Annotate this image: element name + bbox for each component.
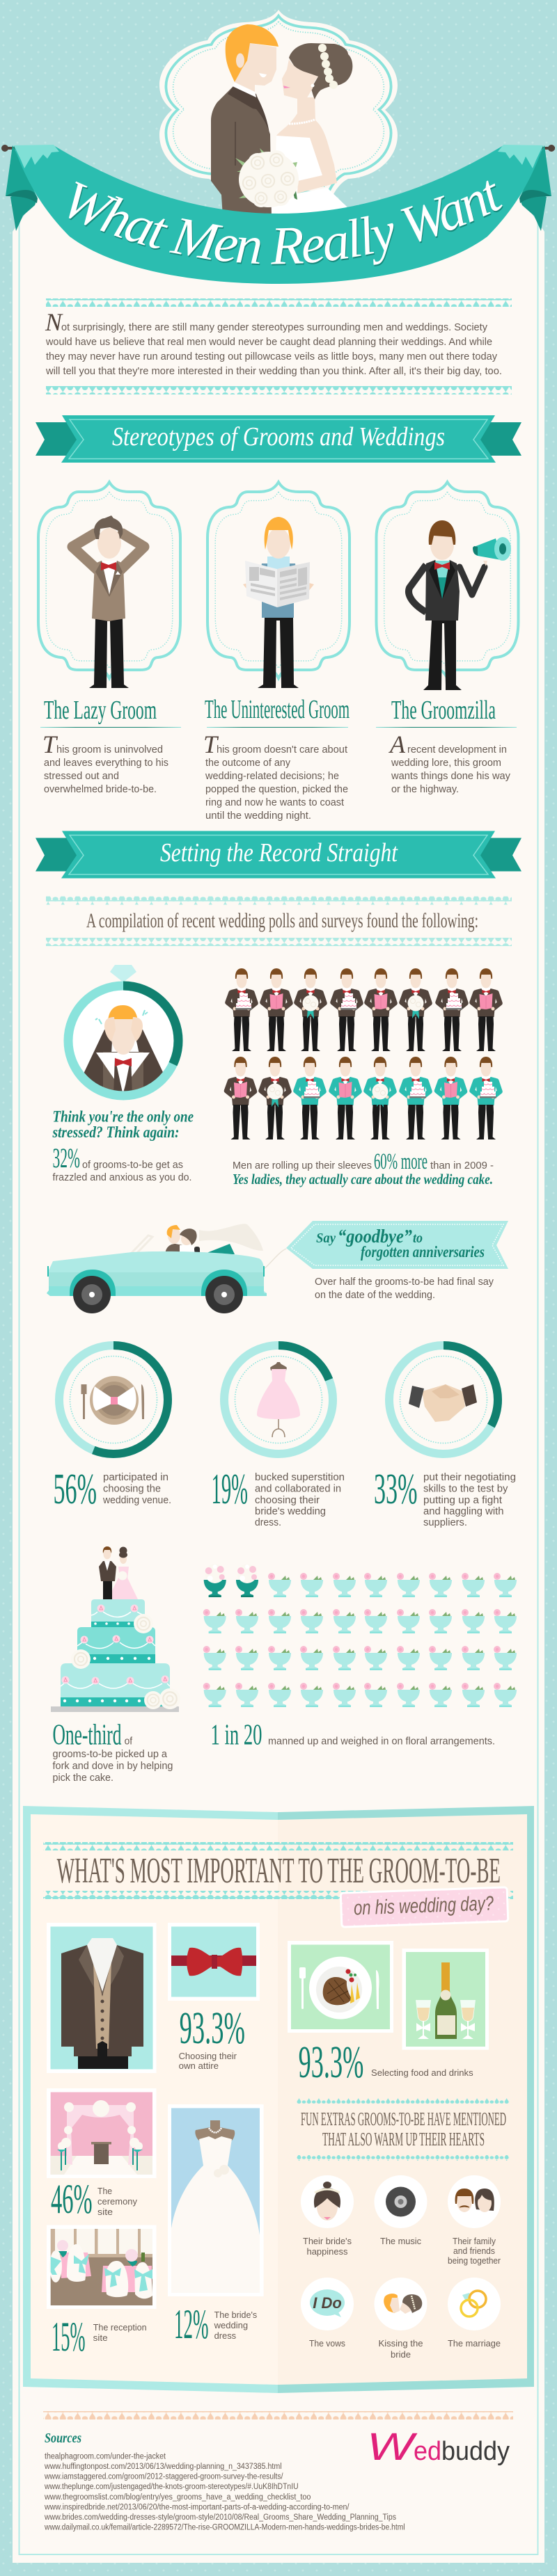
ring stat text: frazzled and anxious as you do. bbox=[53, 1172, 192, 1183]
icon: handshake bbox=[409, 1384, 477, 1422]
stat: 56 percent: 56% bbox=[53, 1466, 97, 1513]
stat: 33 percent: suppliers. bbox=[423, 1517, 467, 1528]
ring stat graphic bbox=[68, 965, 178, 1101]
left ribbon tail bbox=[1, 145, 38, 231]
logo: Wedbuddy: buddy bbox=[441, 2437, 510, 2466]
car illustration bbox=[47, 1224, 286, 1313]
sources: www.iamstaggered.com/groom/2012-staggered-groom-survey-the-results/ bbox=[44, 2472, 283, 2481]
stat: 56 percent: participated in bbox=[103, 1472, 168, 1483]
stat: 56 percent: choosing the bbox=[103, 1483, 161, 1494]
anniversary text bbox=[315, 1277, 494, 1301]
stat: 15 percent reception: site bbox=[93, 2333, 108, 2343]
pictogram: forty floral vases bbox=[203, 1564, 517, 1707]
pink tag bbox=[340, 1887, 508, 1927]
sleeves stat text: 60% more bbox=[374, 1149, 427, 1174]
column: lazy groom: The Lazy Groom bbox=[44, 696, 157, 725]
floral stat text bbox=[210, 1720, 495, 1752]
sources: Sources bbox=[45, 2431, 81, 2446]
stat: 33 percent: skills to the test by bbox=[423, 1483, 508, 1494]
stat: 19 percent: choosing their bbox=[255, 1495, 320, 1506]
sleeves stat text bbox=[233, 1149, 494, 1187]
sources: www.huffingtonpost.com/2013/06/13/wedding-planning_n_3437385.html bbox=[44, 2463, 282, 2471]
intro paragraph bbox=[45, 308, 502, 377]
column: groomzilla: The Groomzilla bbox=[391, 696, 496, 725]
icon: plate and napkin bbox=[81, 1376, 144, 1425]
icon: diamond bbox=[110, 965, 136, 982]
flag callout: “goodbye” bbox=[338, 1226, 412, 1247]
divider bbox=[46, 896, 512, 904]
title ribbon bbox=[1, 145, 555, 284]
intro paragraph: ot surprisingly, there are still many gender stereotypes surrounding men and weddings. Society bbox=[61, 322, 488, 333]
stat: 19 percent: bride's wedding bbox=[255, 1506, 326, 1517]
illustration: groom bbox=[211, 24, 278, 217]
ring stat text: stressed? Think again: bbox=[52, 1123, 180, 1141]
stat: 12 percent gown: The bride's bbox=[214, 2310, 258, 2320]
divider bbox=[46, 386, 512, 394]
column: groomzilla: wants things done his way bbox=[391, 771, 511, 782]
divider bbox=[43, 1842, 513, 1850]
stat: food and drinks bbox=[299, 2037, 473, 2088]
stat: attire: own attire bbox=[179, 2061, 219, 2071]
stat: 12 percent gown: wedding bbox=[214, 2320, 248, 2330]
hero plaque bbox=[159, 10, 398, 198]
divider bbox=[297, 2155, 510, 2161]
intro paragraph: will tell you that they're more interested in their wedding than you think. After all, it's their big day, too. bbox=[45, 366, 502, 377]
column: lazy groom: T bbox=[42, 730, 58, 758]
column: lazy groom: overwhelmed bride-to-be. bbox=[44, 784, 157, 795]
ring stat text: of grooms-to-be get as bbox=[82, 1160, 183, 1171]
flag callout: to bbox=[413, 1231, 423, 1246]
column: uninterested groom: the outcome of any bbox=[205, 758, 291, 769]
stat: 33 percent: 33% bbox=[374, 1466, 418, 1513]
sleeves stat text: Men are rolling up their sleeves bbox=[233, 1160, 372, 1171]
ribbon arc bbox=[14, 145, 543, 284]
sources: www.thegroomslist.com/blog/entry/yes_grooms_have_a_wedding_checklist_too bbox=[44, 2493, 311, 2502]
cake stat text: of bbox=[125, 1736, 133, 1747]
column: groomzilla: recent development in bbox=[407, 744, 507, 755]
stat: food and drinks: 93.3% bbox=[299, 2037, 363, 2088]
illustration: bride bbox=[240, 43, 352, 217]
extra: bride's happiness: happiness bbox=[306, 2246, 348, 2257]
cake stat text bbox=[53, 1720, 173, 1784]
cake stat text: fork and dove in by helping bbox=[53, 1761, 173, 1772]
cake stat text: One-third bbox=[53, 1720, 121, 1752]
column: uninterested groom: popped the question, picked the bbox=[205, 784, 348, 795]
photo: steak dinner bbox=[288, 1941, 393, 2033]
figure: groomzilla bbox=[409, 520, 511, 690]
column: uninterested groom: wedding-related decisions; he bbox=[205, 771, 339, 782]
column: uninterested groom bbox=[203, 695, 350, 822]
section banner: record straight bbox=[36, 831, 521, 878]
donut: 56 percent venue bbox=[59, 1345, 168, 1454]
stat: 15 percent reception: 15% bbox=[52, 2314, 85, 2360]
divider bbox=[43, 1891, 513, 1899]
extra: the marriage bbox=[448, 2278, 501, 2349]
column: groomzilla: A bbox=[389, 730, 406, 758]
column: lazy groom: stressed out and bbox=[44, 771, 119, 782]
extra: kissing the bride: bride bbox=[391, 2349, 411, 2360]
sources: www.brides.com/wedding-dresses-style/groom-style/2010/08/Real_Grooms_Share_Wedding_Planning_Tips bbox=[44, 2513, 396, 2522]
extra: the music: The music bbox=[380, 2236, 421, 2246]
wedding cake illustration bbox=[51, 1546, 180, 1712]
flag callout: forgotten anniversaries bbox=[361, 1243, 485, 1261]
donut: 19 percent dress bbox=[224, 1345, 333, 1454]
photo: ceremony site bbox=[47, 2088, 156, 2178]
extra: the vows: The vows bbox=[309, 2338, 345, 2349]
column: uninterested groom: until the wedding night. bbox=[205, 810, 311, 822]
section banner: stereotypes bbox=[36, 415, 521, 463]
stat: 46 percent ceremony: 46% bbox=[51, 2176, 93, 2222]
sources: www.inspiredbride.net/2013/06/20/the-most-important-parts-of-a-wedding-according-to-men/ bbox=[44, 2503, 350, 2511]
stat: 15 percent reception: The reception bbox=[93, 2322, 147, 2333]
bouquet bbox=[235, 148, 299, 207]
extra: bride's happiness bbox=[301, 2175, 354, 2257]
ring stat text: Think you're the only one bbox=[53, 1107, 194, 1126]
floral stat text: 1 in 20 bbox=[210, 1720, 262, 1752]
extra: family and friends: Their family bbox=[453, 2236, 496, 2246]
extra: the marriage: The marriage bbox=[448, 2338, 501, 2349]
extra: the vows: I Do bbox=[313, 2294, 342, 2312]
anniversary text: on the date of the wedding. bbox=[315, 1290, 435, 1301]
column: uninterested groom: his groom doesn't care about bbox=[217, 744, 347, 755]
photo: bridal gown bbox=[168, 2104, 264, 2296]
photo: champagne bbox=[402, 1949, 489, 2050]
anniversary text: Over half the grooms-to-be had final say bbox=[315, 1277, 494, 1288]
stat: 19 percent: bucked superstition bbox=[255, 1472, 345, 1483]
ribbon fold highlights bbox=[14, 145, 543, 168]
stat: 46 percent ceremony: ceremony bbox=[97, 2196, 137, 2207]
intro paragraph: would have us believe that real men would never be caught dead planning their weddings. And while bbox=[45, 337, 492, 348]
cake stat text: grooms-to-be picked up a bbox=[53, 1749, 168, 1760]
stat: 46 percent ceremony: site bbox=[97, 2207, 113, 2217]
extra: kissing the bride: Kissing the bbox=[379, 2338, 423, 2349]
logo: Wedbuddy: ed bbox=[414, 2437, 441, 2466]
cake stat text: pick the cake. bbox=[53, 1773, 113, 1784]
stat: attire: Choosing their bbox=[179, 2051, 237, 2061]
photo: reception site bbox=[47, 2225, 156, 2309]
title: What Men Really Want bbox=[68, 181, 503, 266]
fun extras heading bbox=[301, 2109, 506, 2150]
divider bbox=[297, 2098, 510, 2104]
intro paragraph: N bbox=[45, 308, 63, 336]
flag callout: Say bbox=[316, 1231, 336, 1246]
extra: family and friends bbox=[448, 2175, 501, 2266]
stat: attire bbox=[179, 2003, 245, 2071]
stat: 12 percent gown: dress bbox=[214, 2330, 237, 2341]
divider bbox=[46, 938, 512, 946]
frame: lazy groom bbox=[38, 482, 180, 678]
donut: 33 percent negotiation bbox=[389, 1345, 498, 1454]
column: uninterested groom: ring and now he wants to coast bbox=[205, 797, 344, 808]
sources: www.dailymail.co.uk/femail/article-2289572/The-rise-GROOMZILLA-Modern-men-hands-weddings-brides-be.html bbox=[44, 2524, 405, 2532]
stat: 33 percent: put their negotiating bbox=[423, 1472, 516, 1483]
stat: 46 percent ceremony: The bbox=[97, 2186, 112, 2196]
stat: 56 percent bbox=[53, 1466, 171, 1513]
column: groomzilla bbox=[376, 696, 517, 795]
photo: suit bbox=[47, 1923, 156, 2073]
stat: food and drinks: Selecting food and drinks bbox=[371, 2067, 473, 2078]
intro paragraph: they may never have run around testing out pillowcase veils as little boys, many men out there today bbox=[46, 351, 498, 362]
stat: 33 percent bbox=[374, 1466, 516, 1528]
logo: Wedbuddy bbox=[367, 2424, 510, 2468]
flag callout bbox=[286, 1221, 508, 1269]
panel: book spread bbox=[23, 1806, 534, 2393]
stat: 12 percent gown: 12% bbox=[174, 2301, 209, 2347]
sources: thealphagroom.com/under-the-jacket bbox=[45, 2453, 166, 2461]
right ribbon tail bbox=[519, 145, 555, 231]
column: uninterested groom: The Uninterested Groom bbox=[205, 695, 350, 724]
extra: kissing the bride bbox=[375, 2278, 427, 2360]
stat: 19 percent: 19% bbox=[212, 1466, 248, 1513]
divider bbox=[43, 2411, 513, 2419]
figure: lazy groom bbox=[72, 515, 144, 688]
extra: family and friends: and friends bbox=[453, 2246, 495, 2256]
floral stat text: manned up and weighed in on floral arrangements. bbox=[268, 1736, 495, 1747]
divider bbox=[46, 298, 512, 307]
photo: bow tie bbox=[168, 1923, 260, 2001]
frame: uninterested groom bbox=[207, 482, 350, 678]
column: groomzilla: or the highway. bbox=[391, 784, 459, 795]
stat: 33 percent: putting up a fight bbox=[423, 1495, 502, 1506]
stat: 33 percent: and haggling with bbox=[423, 1506, 504, 1517]
section banner: stereotypes: Stereotypes of Grooms and Weddings bbox=[112, 422, 445, 451]
stat: 19 percent bbox=[212, 1466, 345, 1528]
pictogram: sixteen grooms bbox=[227, 968, 500, 1139]
sources: www.theplunge.com/justengaged/the-knots-groom-stereotypes/#.UuK8IhDTnIU bbox=[44, 2483, 299, 2491]
logo: Wedbuddy: W bbox=[367, 2424, 418, 2468]
sleeves stat text: Yes ladies, they actually care about the wedding cake. bbox=[233, 1171, 493, 1187]
sleeves stat text: than in 2009 - bbox=[430, 1160, 494, 1171]
stat: 19 percent: dress. bbox=[255, 1517, 281, 1528]
pink tag: on his wedding day? bbox=[353, 1892, 494, 1920]
column: uninterested groom: T bbox=[203, 730, 219, 758]
figure: uninterested groom bbox=[243, 517, 314, 688]
extra: family and friends: being together bbox=[448, 2255, 501, 2266]
column: lazy groom: his groom is uninvolved bbox=[56, 744, 163, 755]
extra: the vows bbox=[301, 2278, 354, 2349]
extra: the music bbox=[375, 2175, 427, 2246]
icon: pink dress on mannequin bbox=[257, 1362, 300, 1437]
stat: 19 percent: and collaborated in bbox=[255, 1483, 341, 1494]
ring stat text: 32% bbox=[53, 1142, 80, 1174]
column: lazy groom: and leaves everything to his bbox=[44, 758, 168, 769]
stat: attire: 93.3% bbox=[180, 2003, 245, 2054]
column: lazy groom bbox=[40, 696, 181, 795]
frame: groomzilla bbox=[376, 482, 518, 678]
stat: 56 percent: wedding venue. bbox=[102, 1495, 171, 1506]
extra: bride's happiness: Their bride's bbox=[303, 2236, 352, 2246]
section banner: record straight: Setting the Record Straight bbox=[160, 838, 398, 867]
column: groomzilla: wedding lore, this groom bbox=[391, 758, 501, 769]
sources bbox=[44, 2431, 405, 2532]
ring stat text bbox=[52, 1107, 194, 1183]
